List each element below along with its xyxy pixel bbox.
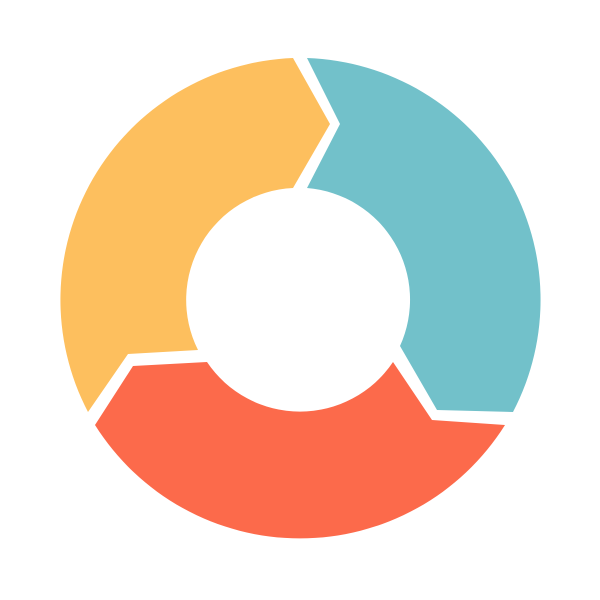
segment: yellow arrow bbox=[60, 58, 330, 412]
segment: red arrow bbox=[95, 362, 505, 538]
segment: teal arrow bbox=[307, 58, 541, 412]
